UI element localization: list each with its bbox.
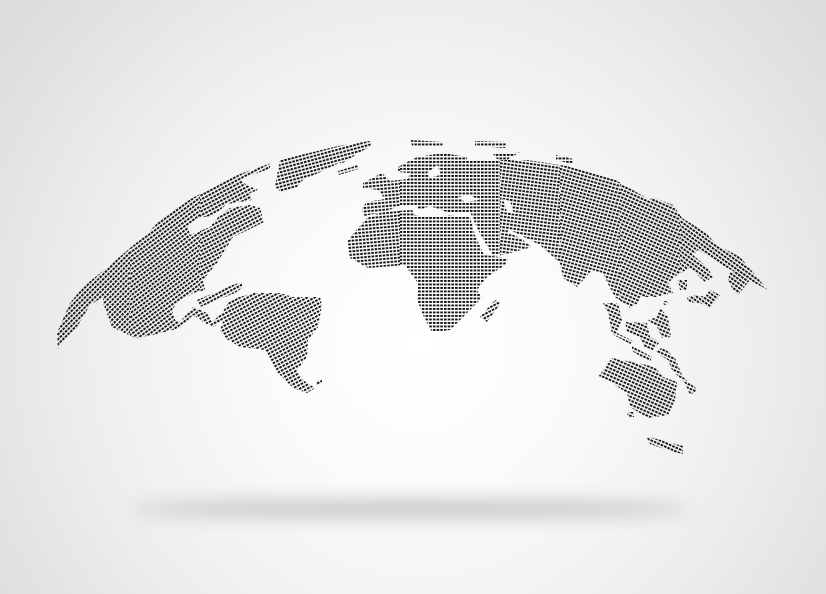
dotted world map (55, 139, 770, 455)
map: Madagascar (480, 300, 501, 322)
map: Japan and Pacific islands (677, 271, 751, 309)
map: Arctic islands (411, 140, 573, 163)
ground shadow under the globe (130, 499, 690, 519)
map: Africa (346, 209, 509, 333)
map: North America (55, 160, 270, 350)
map: Caribbean islands (196, 283, 243, 307)
map: Australia (597, 357, 678, 419)
map: South America (219, 292, 324, 394)
map: Southeast Asia and New Guinea (602, 300, 699, 396)
map: Eurasia (360, 152, 770, 312)
map: New Zealand (646, 436, 683, 454)
map: Greenland (274, 140, 372, 194)
